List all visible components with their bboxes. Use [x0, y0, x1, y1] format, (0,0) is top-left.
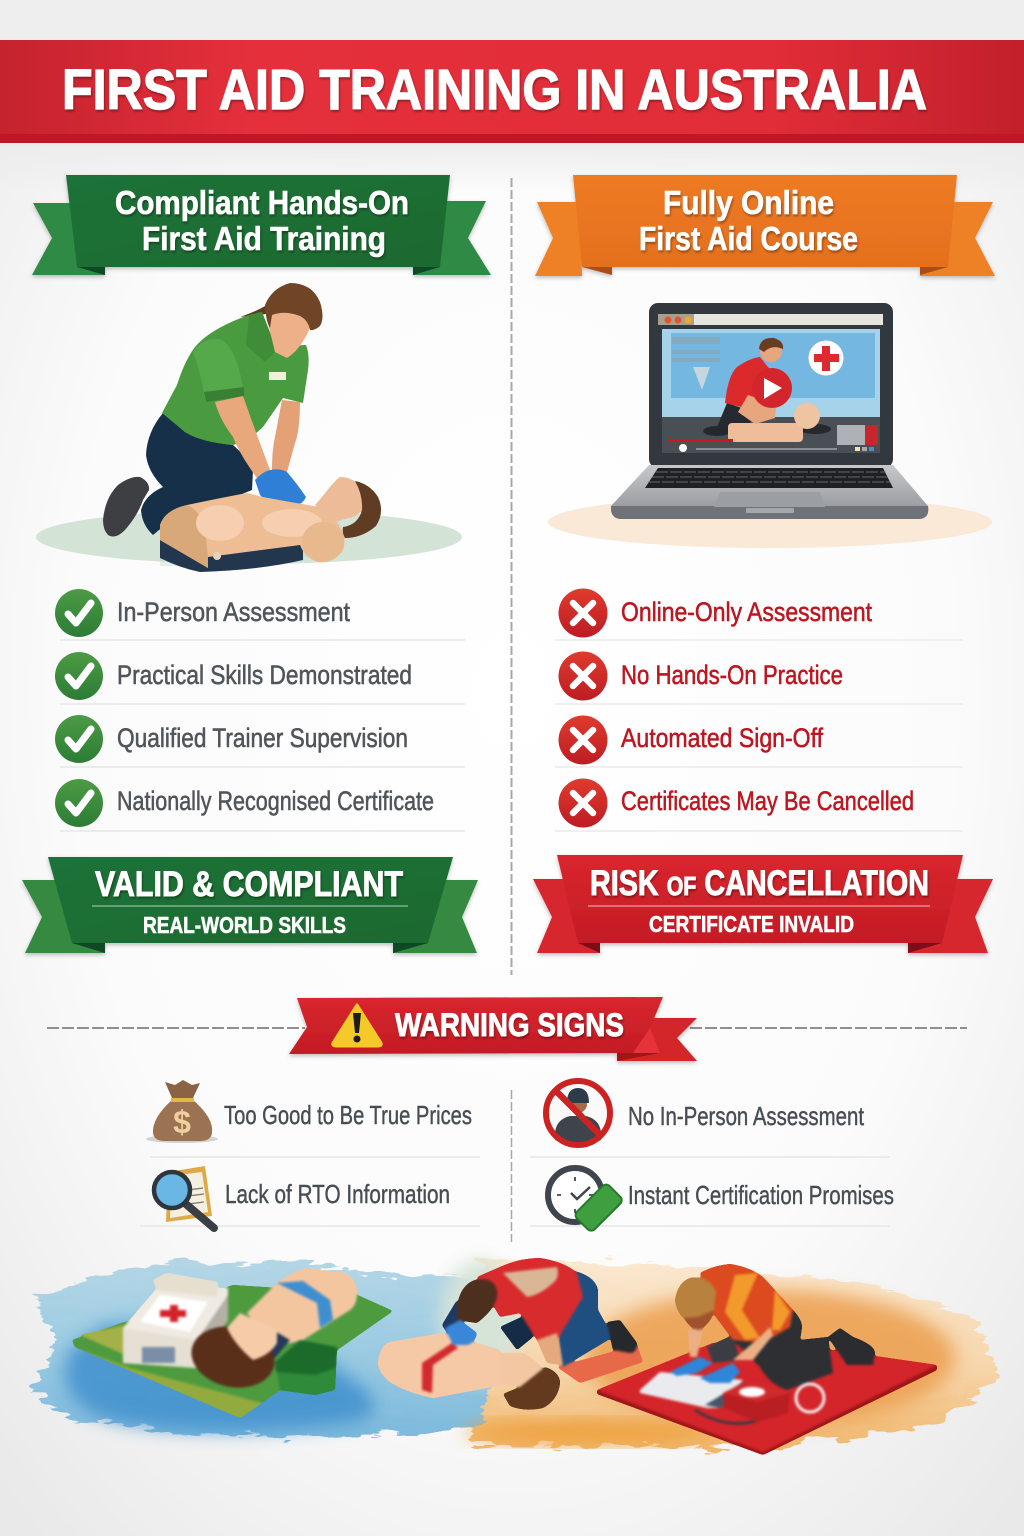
title banner: [0, 0, 1024, 143]
item: qualified trainer: Qualified Trainer Supervision: [117, 723, 408, 753]
sign: too good to be true prices: [146, 1080, 472, 1143]
ribbon heading: compliant: First Aid Training: [142, 220, 386, 257]
illustration: trainer performing CPR on manikin: [36, 283, 462, 572]
ribbon heading: compliant: [32, 175, 491, 275]
panel: fully online course: [533, 175, 995, 953]
checklist: compliant: [55, 589, 465, 831]
checklist: online risks: [555, 588, 963, 831]
panel: compliant hands-on training: [22, 175, 491, 953]
item: practical skills: [55, 652, 465, 704]
wash: deep orange pool: [585, 1290, 955, 1426]
item: national certificate: Nationally Recognised Certificate: [117, 786, 434, 816]
sign: instant certification promises: Instant Certification Promises: [628, 1180, 894, 1210]
item: in-person assessment: In-Person Assessment: [117, 597, 350, 627]
item: qualified trainer: [55, 715, 465, 767]
wash: orange bottom stroke: [465, 1420, 715, 1444]
ribbon verdict: valid and compliant: [22, 857, 478, 953]
ribbon verdict: risk of cancellation: RISK OF CANCELLATION: [590, 864, 929, 903]
ribbon heading: online: Fully Online: [663, 184, 834, 221]
icon: money bag: [146, 1080, 218, 1143]
brush wash: pale blue: [32, 1262, 520, 1437]
item: certificates may be cancelled: [555, 778, 963, 831]
title: FIRST AID TRAINING IN AUSTRALIA: [62, 58, 927, 122]
wash blend between blue and orange: [440, 1260, 520, 1380]
item: national certificate: [55, 779, 465, 831]
panel: warning signs: [47, 997, 967, 1242]
sign: no in-person assessment: No In-Person Assessment: [628, 1101, 865, 1131]
ribbon heading: online: First Aid Course: [639, 220, 858, 257]
ribbon verdict: risk of cancellation: [533, 855, 993, 953]
item: no hands-on practice: [555, 652, 963, 704]
illustration: laptop with video course: [548, 303, 992, 548]
icon: warning triangle: [333, 1005, 381, 1046]
green mat with first aid kit and manikin: [72, 1268, 393, 1418]
item: automated sign-off: Automated Sign-Off: [621, 723, 823, 753]
sign: lack of RTO information: Lack of RTO Information: [225, 1179, 450, 1209]
brush wash: pale orange: [470, 1260, 1000, 1448]
item: online-only assessment: [555, 588, 963, 640]
item: online-only assessment: Online-Only Assessment: [621, 597, 872, 627]
sign: instant certification promises: [548, 1168, 894, 1233]
item: automated sign-off: [555, 716, 963, 767]
icon: prohibited person: [546, 1081, 610, 1145]
ribbon verdict: valid and compliant: REAL-WORLD SKILLS: [143, 912, 346, 938]
ribbon heading: compliant: Compliant Hands-On: [115, 184, 409, 221]
item: certificates may be cancelled: Certificates May Be Cancelled: [621, 786, 914, 816]
item: in-person assessment: [55, 589, 465, 640]
ribbon verdict: risk of cancellation: CERTIFICATE INVALID: [649, 911, 854, 937]
sign: no in-person assessment: [546, 1081, 865, 1145]
warning signs divider and ribbon: [47, 997, 967, 1061]
sign: lack of RTO information: [154, 1166, 450, 1228]
illustration: hands-on training scene: [32, 1258, 1000, 1455]
icon: clock with green tag: [548, 1168, 624, 1233]
icon: money bag: $: [173, 1104, 191, 1140]
item: no hands-on practice: No Hands-On Practice: [621, 660, 843, 690]
ribbon heading: online: [535, 175, 995, 276]
ribbon verdict: valid and compliant: VALID & COMPLIANT: [95, 865, 403, 904]
sign: too good to be true prices: Too Good to Be True Prices: [224, 1100, 472, 1130]
icon: magnifier over document: [154, 1166, 214, 1228]
centre rescuer and manikin: [378, 1258, 643, 1410]
wash: deep blue shadow: [65, 1320, 375, 1431]
red mat with rescuer and AED: [597, 1264, 937, 1455]
warning signs divider and ribbon: WARNING SIGNS: [395, 1007, 624, 1043]
column divider: [510, 178, 512, 975]
item: practical skills: Practical Skills Demonstrated: [117, 660, 412, 690]
